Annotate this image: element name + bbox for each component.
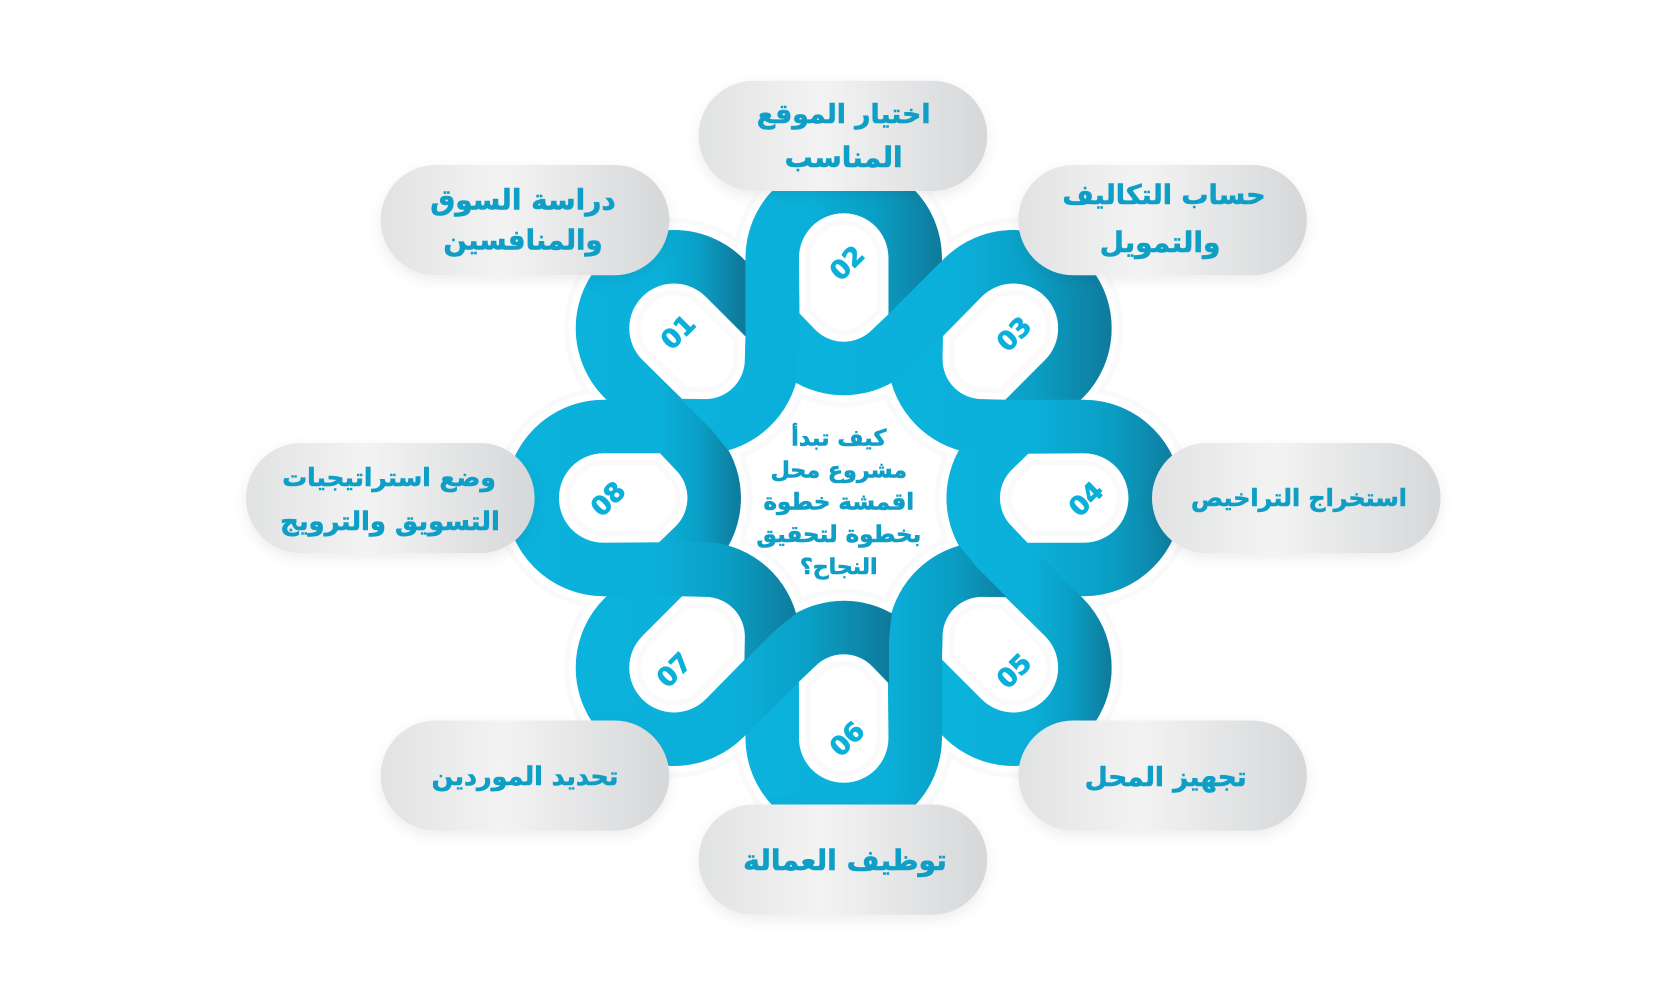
pill 08: marketing strategies: التسويق والترويج <box>280 507 500 537</box>
pill 01: market study: دراسة السوق <box>430 184 616 216</box>
step number 08: 08 <box>585 476 632 523</box>
pill 01: market study: والمنافسين <box>443 224 603 256</box>
center title: بخطوة لتحقيق <box>756 522 921 548</box>
pill 06: hiring staff: توظيف العمالة <box>743 844 947 877</box>
step number 06: 06 <box>824 716 871 763</box>
pill 07: choosing suppliers <box>381 720 669 831</box>
step number 03: 03 <box>991 311 1038 358</box>
pill 03: costs and financing <box>1018 165 1307 275</box>
pill 02: choosing location <box>699 81 987 191</box>
step number 07: 07 <box>651 647 698 694</box>
pill 02: choosing location: المناسب <box>785 141 903 174</box>
center title <box>756 422 921 580</box>
center title: اقمشة خطوة <box>763 490 914 516</box>
pill 03: costs and financing: والتمويل <box>1100 226 1220 259</box>
pill 08: marketing strategies: وضع استراتيجيات <box>282 463 496 493</box>
pill 07: choosing suppliers: تحديد الموردين <box>432 761 618 792</box>
step number 02: 02 <box>824 240 871 287</box>
over-layer: crossing bands of the eight rings <box>558 213 1129 783</box>
pill 06: hiring staff <box>699 804 987 915</box>
under-layer: outer loops of the eight rings <box>506 160 1182 836</box>
pill 04: licences <box>1152 443 1441 553</box>
step number 01: 01 <box>655 309 702 356</box>
center title: مشروع محل <box>771 458 907 484</box>
center title: النجاح؟ <box>800 555 878 580</box>
pill 05: equipping the shop <box>1018 720 1307 831</box>
pill 02: choosing location: اختيار الموقع <box>757 99 930 130</box>
center title: كيف تبدأ <box>791 422 887 452</box>
pill 04: licences: استخراج التراخيص <box>1191 484 1407 512</box>
soft halo around the woven rings <box>506 160 1182 836</box>
pill 03: costs and financing: حساب التكاليف <box>1062 180 1266 211</box>
step number 04: 04 <box>1063 476 1110 523</box>
pill 08: marketing strategies <box>246 443 535 553</box>
pill 01: market study <box>381 165 669 275</box>
step number 05: 05 <box>991 648 1038 695</box>
pill 05: equipping the shop: تجهيز المحل <box>1085 762 1247 793</box>
woven ribbon flower made of eight interlocking rings <box>506 160 1182 836</box>
